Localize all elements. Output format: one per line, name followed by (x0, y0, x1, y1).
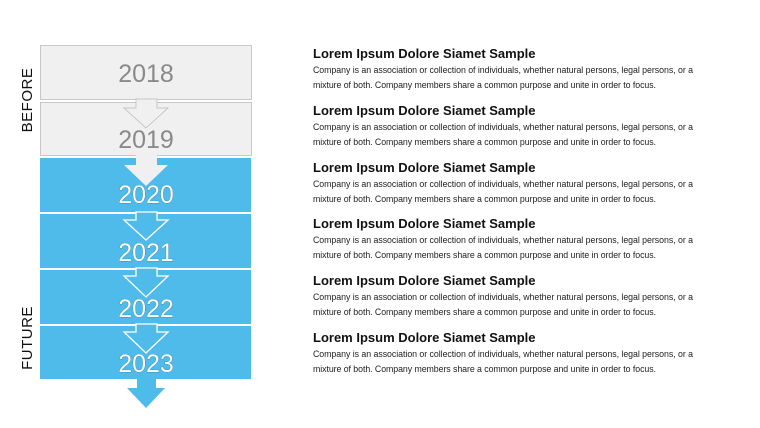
item 2: Company is an association or collection of individuals, whether natural persons, legal persons, or a (313, 122, 693, 132)
item 1: Company is an association or collection of individuals, whether natural persons, legal persons, or a (313, 65, 693, 75)
item 6: Company is an association or collection of individuals, whether natural persons, legal persons, or a (313, 349, 693, 359)
item 4: mixture of both. Company members share a common purpose and unite in order to focus. (313, 250, 656, 260)
box 2018 (40, 46, 252, 100)
text blocks (313, 46, 693, 374)
box 2022: 2022 (118, 295, 174, 323)
item 4: Lorem Ipsum Dolore Siamet Sample (313, 216, 536, 231)
item 1: Lorem Ipsum Dolore Siamet Sample (313, 46, 536, 61)
item 1 (313, 46, 693, 90)
label: FUTURE: FUTURE (19, 306, 36, 370)
box 2020: 2020 (118, 181, 174, 209)
box 2019: 2019 (118, 126, 174, 154)
box 2023 (40, 324, 251, 379)
item 5: Lorem Ipsum Dolore Siamet Sample (313, 273, 536, 288)
item 3: Lorem Ipsum Dolore Siamet Sample (313, 160, 536, 175)
item 2: Lorem Ipsum Dolore Siamet Sample (313, 103, 536, 118)
item 5 (313, 273, 693, 317)
item 5: Company is an association or collection of individuals, whether natural persons, legal persons, or a (313, 292, 693, 302)
box 2019 (40, 99, 252, 156)
item 2: mixture of both. Company members share a common purpose and unite in order to focus. (313, 137, 656, 147)
box 2021: 2021 (118, 239, 174, 267)
item 1: mixture of both. Company members share a common purpose and unite in order to focus. (313, 80, 656, 90)
item 3: Company is an association or collection of individuals, whether natural persons, legal persons, or a (313, 179, 693, 189)
item 6: Lorem Ipsum Dolore Siamet Sample (313, 330, 536, 345)
item 6: mixture of both. Company members share a common purpose and unite in order to focus. (313, 364, 656, 374)
item 4: Company is an association or collection of individuals, whether natural persons, legal persons, or a (313, 235, 693, 245)
item 5: mixture of both. Company members share a common purpose and unite in order to focus. (313, 307, 656, 317)
box 2023: 2023 (118, 350, 174, 378)
box 2022 (40, 268, 251, 324)
timeline (40, 46, 252, 408)
item 4 (313, 216, 693, 260)
arrow: bottom (127, 379, 165, 408)
box 2020 (40, 154, 251, 212)
item 3: mixture of both. Company members share a common purpose and unite in order to focus. (313, 194, 656, 204)
box 2018: 2018 (118, 60, 174, 88)
item 6 (313, 330, 693, 374)
item 2 (313, 103, 693, 147)
label: BEFORE: BEFORE (19, 68, 36, 132)
box 2021 (40, 212, 251, 268)
item 3 (313, 160, 693, 204)
